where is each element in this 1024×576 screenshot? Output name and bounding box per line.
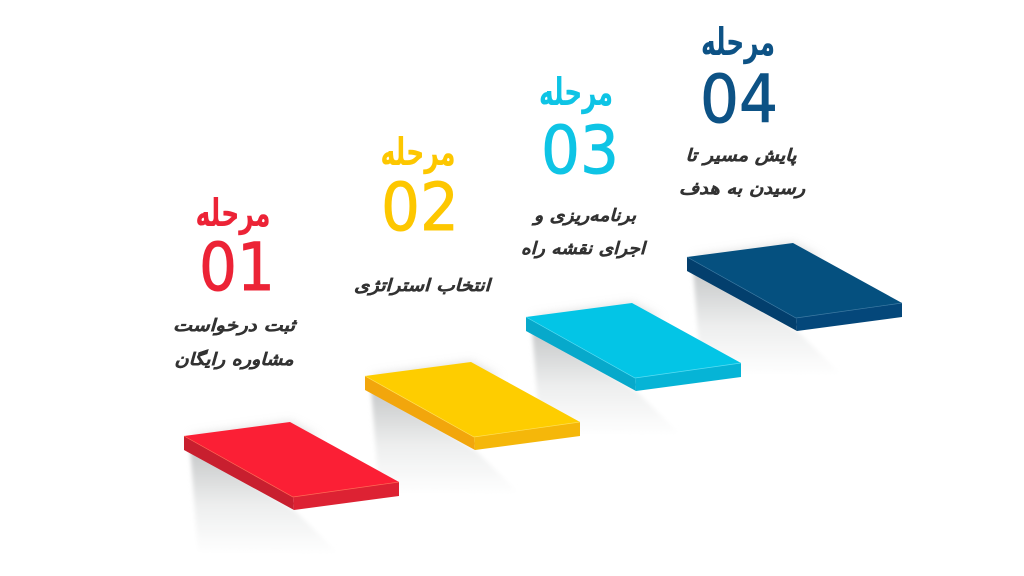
step 4 label xyxy=(679,20,806,199)
heading: step 3: مرحله xyxy=(539,70,613,114)
description: step 3 xyxy=(521,206,647,259)
description: step 1: مشاوره رایگان xyxy=(174,349,294,370)
description: step 1: ثبت درخواست xyxy=(173,316,298,336)
number 01: 01 xyxy=(199,229,275,306)
description: step 1 xyxy=(173,316,298,370)
step 3: cyan slab xyxy=(526,303,741,436)
heading: step 1: مرحله xyxy=(196,191,270,235)
step 2 label xyxy=(354,130,493,296)
step 2: yellow slab xyxy=(365,362,580,495)
description: step 4: رسیدن به هدف xyxy=(679,179,806,199)
number 03: 03 xyxy=(541,112,619,189)
description: step 4 xyxy=(679,146,806,199)
step 1 label xyxy=(173,191,298,370)
heading: step 2: مرحله xyxy=(380,130,456,174)
number 02: 02 xyxy=(381,169,459,246)
description: step 4: پایش مسیر تا xyxy=(686,146,797,166)
step 3 label xyxy=(521,70,647,259)
number 04: 04 xyxy=(700,61,778,138)
heading: step 4: مرحله xyxy=(701,20,775,64)
description: step 3: اجرای نقشه راه xyxy=(521,239,647,259)
description: step 2: انتخاب استراتژی xyxy=(354,276,493,296)
description: step 3: برنامه‌ریزی و xyxy=(531,206,636,226)
step 1: red slab xyxy=(184,422,399,555)
step 4: navy slab xyxy=(687,243,902,376)
